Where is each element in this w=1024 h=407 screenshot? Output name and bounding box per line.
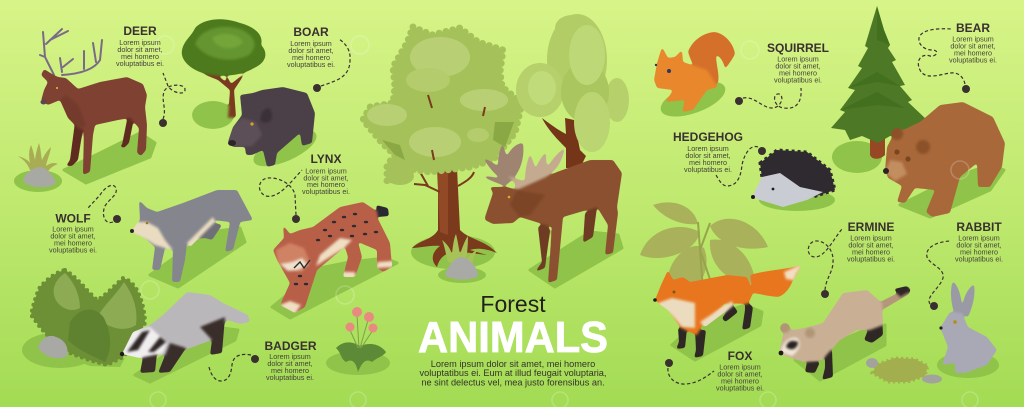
callout: lynx [259, 152, 350, 223]
callout: squirrel: voluptatibus ei. [774, 76, 822, 84]
title block [418, 291, 608, 388]
callout: squirrel: mei homero [779, 68, 817, 78]
title block: Lorem ipsum dolor sit amet, mei homero [431, 359, 595, 369]
pine tree [831, 6, 927, 173]
callout: squirrel [735, 41, 829, 108]
rock and grass centre [442, 234, 478, 280]
callout: hedgehog: voluptatibus ei. [684, 165, 732, 174]
flower plant [326, 307, 390, 375]
callout: ermine: ERMINE [848, 220, 894, 234]
callout: boar: BOAR [293, 25, 329, 39]
callout: wolf: WOLF [55, 212, 91, 226]
large oak tree [363, 27, 522, 283]
callout: bear: Lorem ipsum [952, 34, 994, 44]
callout: boar: voluptatibus ei. [287, 60, 335, 69]
lynx [272, 202, 397, 318]
callout: deer: DEER [123, 24, 157, 38]
ermine [779, 286, 911, 380]
callout: badger [209, 339, 317, 382]
callout: ermine: Lorem ipsum [850, 234, 892, 242]
callout: bear: voluptatibus ei. [949, 56, 997, 64]
watermark rings [141, 36, 978, 407]
callout: rabbit [927, 220, 1003, 310]
callout: fox: voluptatibus ei. [716, 384, 764, 392]
callout: wolf: voluptatibus ei. [49, 246, 97, 254]
callout: fox: Lorem ipsum [719, 362, 761, 372]
callout: fox [665, 349, 764, 392]
callout: badger: voluptatibus ei. [266, 373, 314, 382]
boar [228, 87, 321, 174]
callout: wolf [49, 185, 121, 254]
hedgehog [751, 150, 835, 211]
callout: deer: mei homero [121, 52, 159, 61]
callout: lynx: voluptatibus ei. [302, 187, 350, 196]
callout: wolf: Lorem ipsum [52, 224, 94, 234]
callout: boar: mei homero [292, 53, 330, 62]
title block: voluptatibus ei. Eum at illud feugait voluptaria, [420, 368, 606, 378]
callout: wolf: mei homero [54, 238, 92, 248]
callout: deer: voluptatibus ei. [116, 59, 164, 68]
callout: boar: Lorem ipsum [290, 39, 332, 48]
tree behind boar [182, 19, 265, 129]
moose [483, 143, 622, 287]
callout: rabbit: Lorem ipsum [958, 234, 1000, 242]
callout: lynx: mei homero [307, 180, 345, 189]
rabbit [937, 281, 999, 378]
callout: hedgehog: mei homero [689, 158, 727, 167]
callout: ermine: mei homero [852, 248, 890, 256]
callout: badger: mei homero [271, 366, 309, 375]
callout: fox: dolor sit amet, [717, 370, 763, 378]
wolf [130, 190, 253, 287]
squirrel [654, 32, 735, 124]
callout: rabbit: dolor sit amet, [956, 240, 1002, 250]
callout: deer [116, 24, 185, 127]
callout: ermine: dolor sit amet, [848, 240, 894, 250]
callout: squirrel: dolor sit amet, [775, 62, 821, 70]
right tree [516, 14, 629, 168]
title block: Forest [480, 291, 546, 317]
bush with rock [22, 270, 145, 368]
callout: bear: BEAR [956, 21, 990, 35]
callout: deer: Lorem ipsum [119, 38, 161, 47]
callout: hedgehog [673, 130, 766, 186]
title block: ANIMALS [418, 313, 608, 362]
callout: badger: dolor sit amet, [267, 359, 313, 368]
callout: lynx: LYNX [311, 152, 341, 166]
moss and stones [866, 358, 942, 384]
callout: boar: dolor sit amet, [288, 46, 334, 55]
callout: rabbit: voluptatibus ei. [955, 254, 1003, 264]
callout: ermine [808, 220, 895, 298]
title block: ne sint delectus vel, mea justo forensibus an. [421, 378, 605, 388]
callout: wolf: dolor sit amet, [50, 232, 96, 240]
callout: bear: mei homero [954, 48, 992, 58]
callout: ermine: voluptatibus ei. [847, 254, 895, 264]
callout: squirrel: Lorem ipsum [777, 54, 819, 64]
callout: hedgehog: Lorem ipsum [687, 144, 729, 153]
rock and grass left [14, 143, 62, 192]
callout: squirrel: SQUIRREL [767, 41, 829, 55]
callout: lynx: dolor sit amet, [303, 174, 349, 182]
moose left antler [483, 143, 523, 186]
callout: rabbit: RABBIT [956, 220, 1002, 234]
callout: lynx: Lorem ipsum [305, 166, 347, 176]
callout: rabbit: mei homero [960, 248, 998, 256]
callout: deer: dolor sit amet, [117, 45, 163, 54]
callout: boar [287, 25, 350, 92]
badger [120, 292, 250, 382]
callout: badger: BADGER [264, 339, 317, 353]
callout: bear: dolor sit amet, [950, 42, 996, 50]
fox [653, 265, 801, 360]
fern plant [640, 202, 768, 294]
callout: fox: mei homero [721, 376, 759, 386]
callout: fox: FOX [728, 349, 752, 363]
callout: bear [918, 21, 997, 93]
deer [40, 29, 155, 183]
moose right antler [508, 148, 565, 190]
callout: badger: Lorem ipsum [269, 352, 311, 361]
callout: hedgehog: dolor sit amet, [685, 151, 731, 160]
callout: hedgehog: HEDGEHOG [673, 130, 743, 144]
bear [883, 102, 1005, 217]
